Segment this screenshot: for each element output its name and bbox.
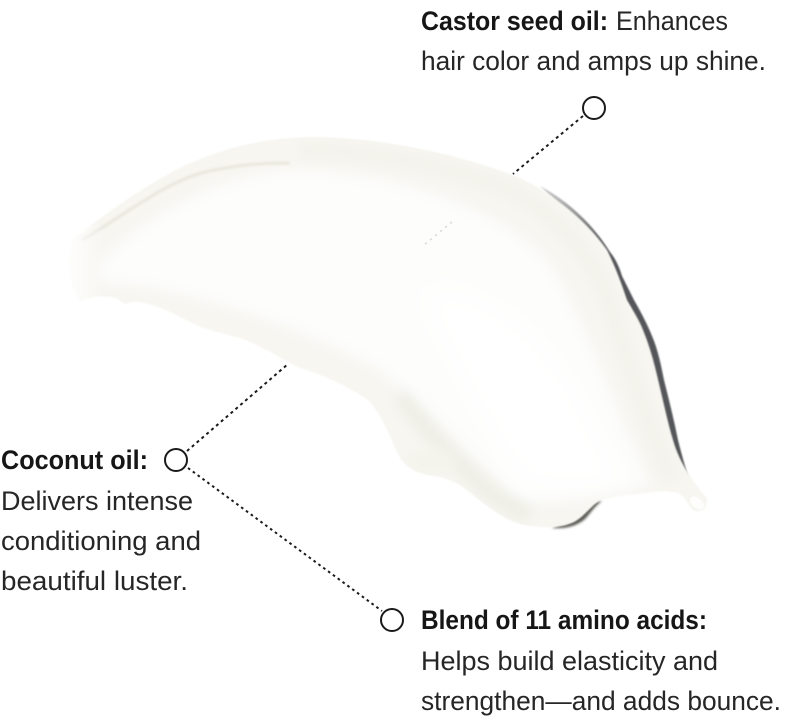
text: blend of 11 amino acids: strengthen—and adds bounce.	[421, 686, 781, 716]
faint dotted line through cream	[424, 222, 452, 245]
text: coconut oil: conditioning and	[1, 526, 201, 556]
text: coconut oil: beautiful luster.	[1, 566, 188, 596]
marker: castor seed oil	[583, 97, 605, 119]
leader line: castor seed oil	[513, 116, 583, 174]
text: blend of 11 amino acids: Helps build elasticity and	[421, 646, 718, 676]
marker: coconut oil	[165, 449, 187, 471]
marker: amino acids	[381, 609, 403, 631]
leader line: amino acids	[188, 468, 382, 611]
text: castor seed oil: Castor seed oil:	[421, 6, 608, 36]
text: coconut oil	[1, 445, 201, 596]
dark shadow along right edge	[540, 186, 690, 482]
text: blend of 11 amino acids: Blend of 11 amino acids:	[421, 605, 707, 635]
cream tip	[688, 494, 706, 512]
text: blend of 11 amino acids	[421, 605, 781, 716]
cream bright center	[420, 289, 630, 488]
cream top ridge crease	[82, 163, 290, 240]
cream lower fold	[400, 395, 530, 515]
text: coconut oil: Coconut oil:	[1, 445, 148, 475]
text: castor seed oil	[421, 6, 766, 76]
leader line: coconut oil	[187, 364, 288, 451]
cream inner highlight	[100, 170, 650, 501]
text: castor seed oil: hair color and amps up shine.	[421, 46, 766, 76]
cream swatch	[60, 137, 707, 528]
cream body	[69, 137, 707, 527]
text: castor seed oil: Enhances	[616, 6, 728, 36]
shadow under lower lip	[552, 501, 602, 528]
cream bump	[404, 449, 456, 475]
text: coconut oil: Delivers intense	[1, 486, 193, 516]
left fade	[60, 225, 105, 310]
cream ridge band	[300, 150, 672, 480]
